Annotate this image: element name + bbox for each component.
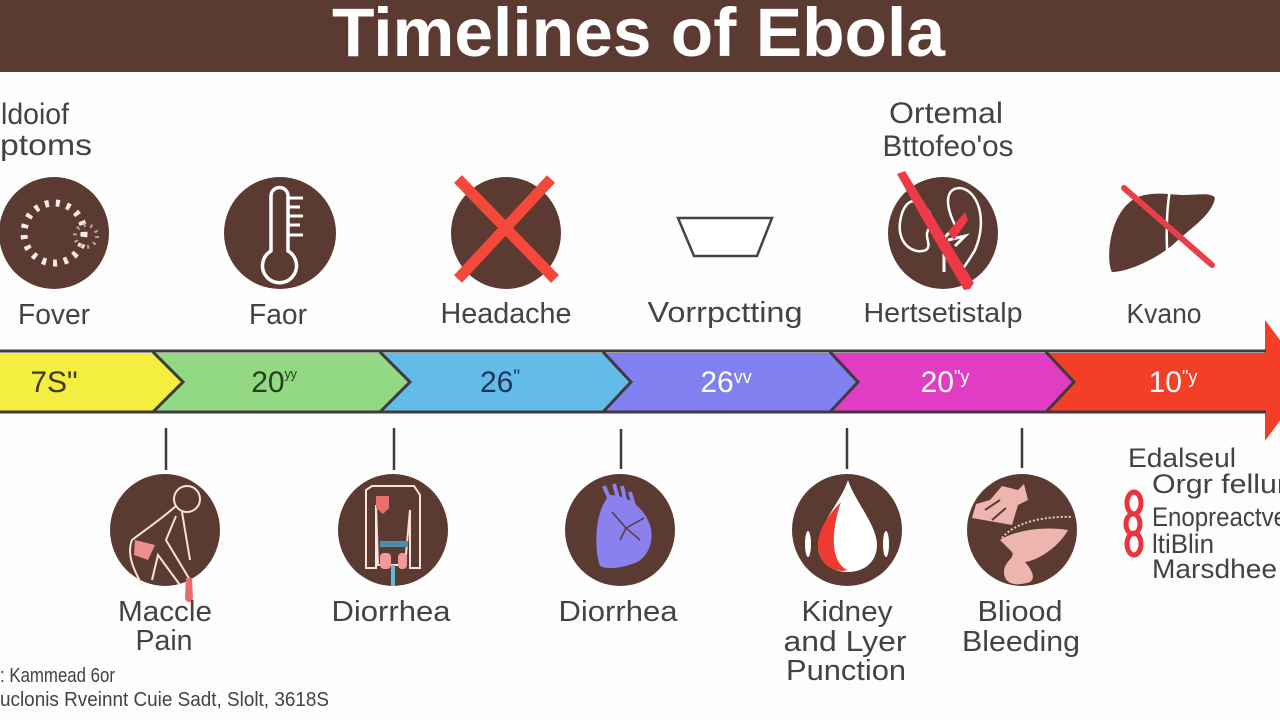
- timeline arrow: [0, 320, 1280, 441]
- icon: bleeding skin: [967, 474, 1077, 586]
- label: vomiting: Vorrpctting: [648, 297, 802, 329]
- label: diorrhea second: Diorrhea: [558, 596, 678, 628]
- label: faor: Faor: [249, 299, 307, 331]
- segment: purple: [603, 353, 858, 411]
- heading: external bleeding: Ortemal: [889, 97, 1003, 130]
- heading: external bleeding: Bttofeo'os: [882, 130, 1014, 163]
- heading: external bleeding: [882, 97, 1014, 163]
- icon: blood drop: [792, 474, 902, 586]
- label: kidney and liver function: Kidney: [802, 596, 893, 628]
- footnote: uclonis Rveinnt Cuie Sadt, Slolt, 3618S: [0, 689, 329, 711]
- segment: green: [153, 353, 410, 411]
- segment: red: [1046, 320, 1280, 441]
- label: muscle pain: [118, 596, 212, 657]
- duration label: red: 10: [1149, 366, 1182, 399]
- text block: organ failure list: [1128, 443, 1280, 584]
- icon: liver crossed: [1109, 184, 1215, 272]
- duration label: purple: vv: [734, 367, 752, 387]
- icon: thermometer: [224, 177, 336, 289]
- heading: onset of symptoms: ptoms: [0, 129, 92, 162]
- duration label: yellow: 7S": [30, 366, 78, 399]
- heading: onset of symptoms: [0, 98, 92, 162]
- label: hertsetistalp: Hertsetistalp: [864, 297, 1022, 328]
- connector lines: [166, 428, 1022, 470]
- label: kidney and liver function: Punction: [786, 655, 906, 687]
- icon: purple organ: [565, 474, 675, 586]
- label: diorrhea: Diorrhea: [332, 596, 451, 628]
- label: kvano: Kvano: [1126, 298, 1202, 329]
- label: kidney and liver function: and Lyer: [784, 626, 907, 658]
- footnote: : Kammead 6or: [0, 665, 115, 687]
- text block: organ failure list: Orgr fellur: [1152, 469, 1280, 499]
- duration label: magenta: 20: [921, 366, 954, 399]
- label: muscle pain: Maccle: [118, 596, 212, 628]
- text block: organ failure list: ltiBlin: [1152, 529, 1214, 559]
- icon: muscle pain: [110, 474, 220, 602]
- duration label: green: ʸʸ: [284, 367, 298, 388]
- text block: organ failure list: Edalseul: [1128, 443, 1236, 473]
- label: muscle pain: Pain: [136, 625, 192, 657]
- duration label: purple: 26: [700, 366, 734, 399]
- text block: organ failure list: Marsdhee: [1152, 554, 1277, 584]
- duration label: magenta: "y: [954, 367, 969, 387]
- label: fever: Fover: [18, 299, 90, 331]
- label: blood bleeding: Bliood: [978, 596, 1062, 628]
- icon: diarrhea body: [338, 474, 448, 586]
- segment: magenta: [830, 353, 1074, 411]
- duration label: red: "y: [1182, 367, 1197, 387]
- heading: onset of symptoms: ldoiof: [1, 98, 70, 131]
- icon: red intestine: [1126, 492, 1141, 555]
- icon: fever: [0, 177, 109, 289]
- duration label: blue: 26: [480, 366, 513, 399]
- title banner: [0, 0, 1280, 72]
- label: headache: Headache: [440, 298, 572, 330]
- label: blood bleeding: Bleeding: [962, 626, 1080, 658]
- icon: vomiting bowl: [678, 218, 772, 256]
- label: kidney and liver function: [784, 596, 907, 687]
- segment: yellow: [0, 353, 183, 411]
- icon: headache crossed circle: [451, 177, 561, 289]
- duration label: green: 20: [251, 366, 285, 399]
- segment: blue: [380, 353, 631, 411]
- icon: kidneys crossed: [888, 171, 998, 290]
- duration label: blue: ": [513, 367, 520, 388]
- footnote: [0, 665, 329, 711]
- label: blood bleeding: [962, 596, 1080, 658]
